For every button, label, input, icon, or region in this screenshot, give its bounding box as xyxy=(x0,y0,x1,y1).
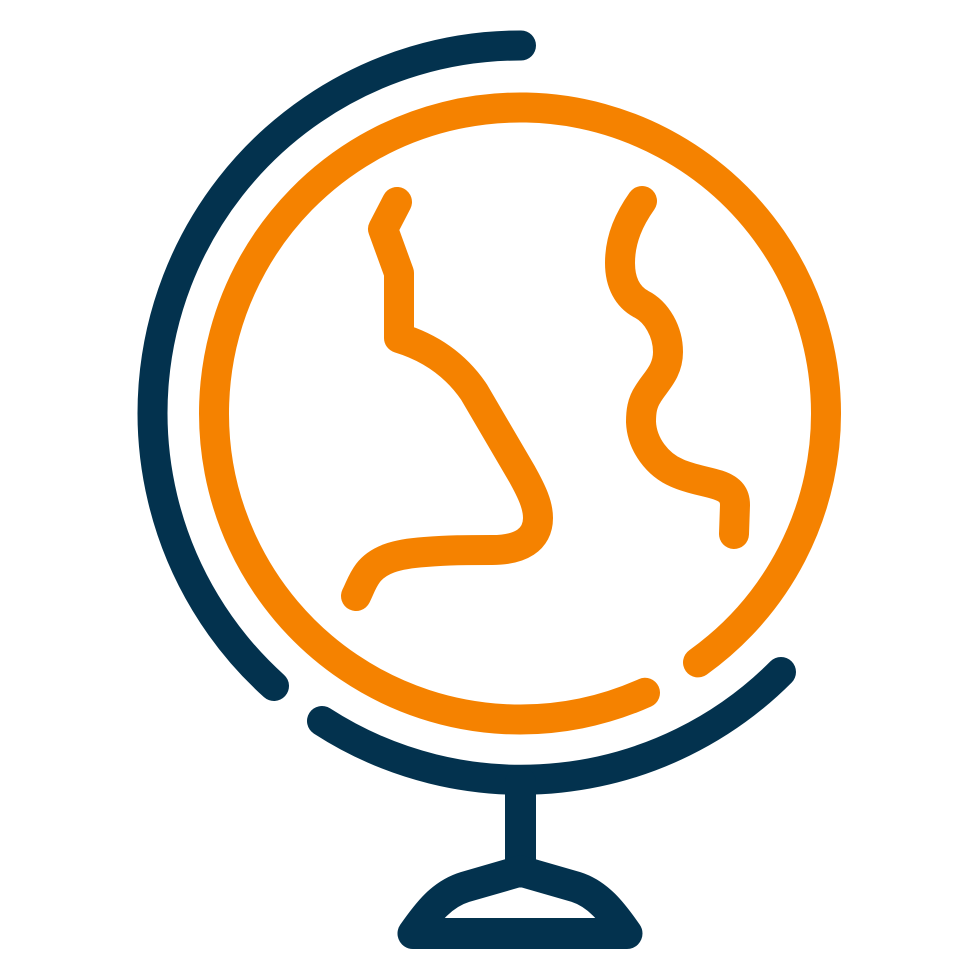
meridian arc xyxy=(153,45,521,686)
stand base xyxy=(413,871,627,934)
stand post xyxy=(505,782,536,872)
lower arc xyxy=(322,672,781,780)
right continent xyxy=(620,201,735,534)
globe outline xyxy=(214,107,826,719)
left continent xyxy=(356,202,538,596)
